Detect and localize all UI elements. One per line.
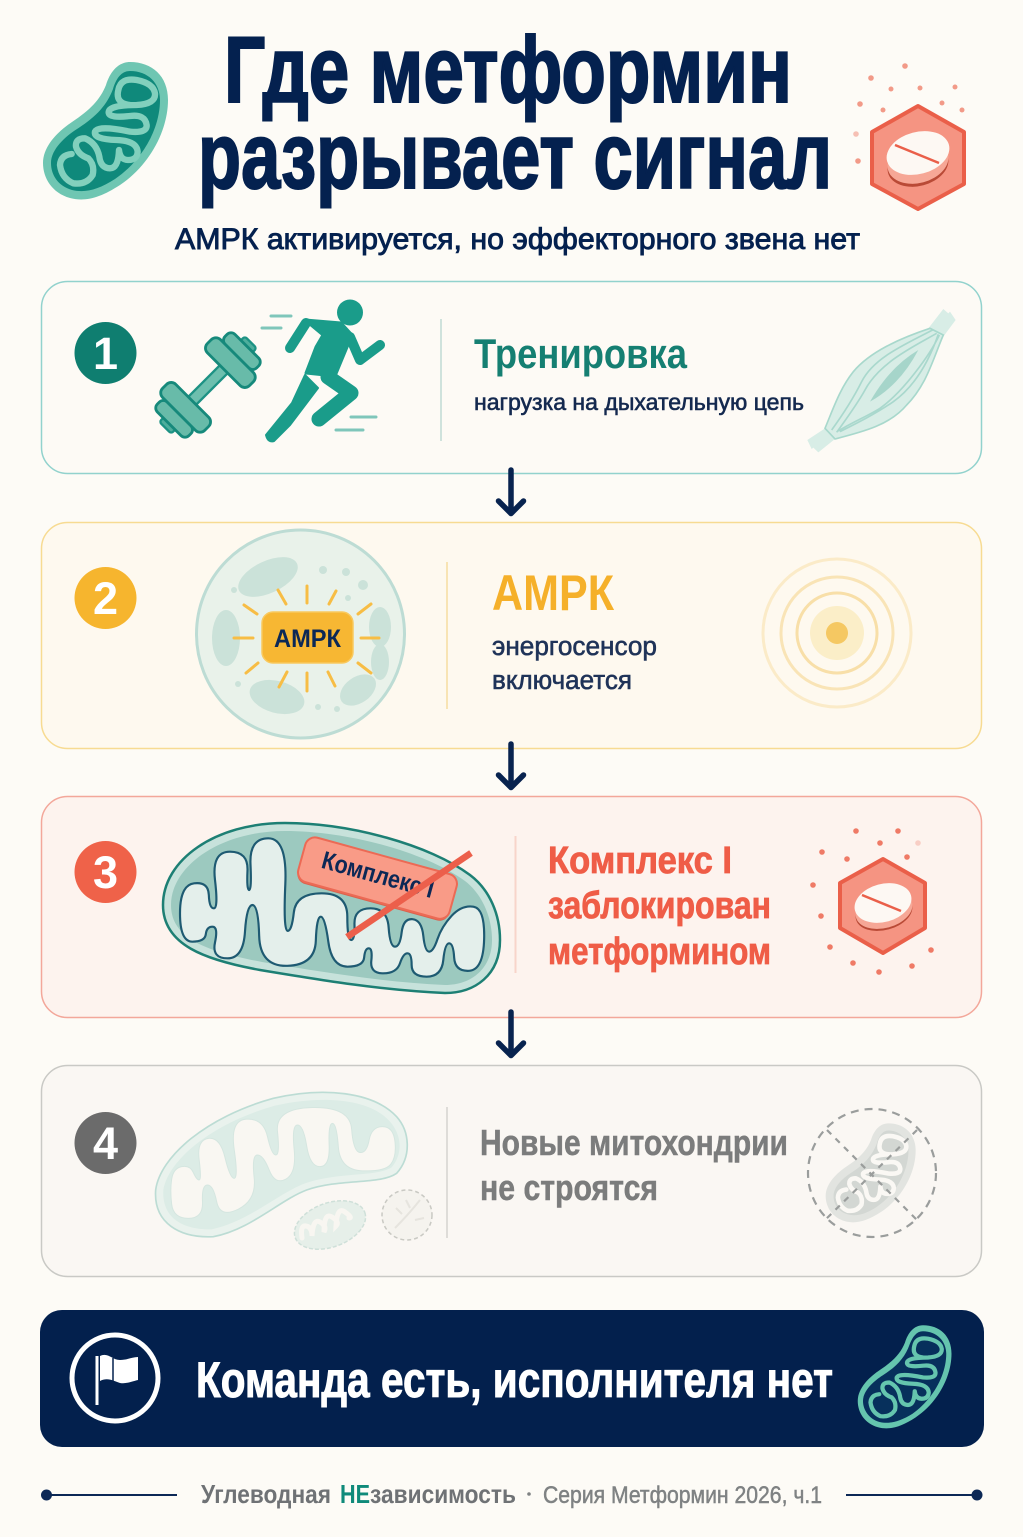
AMPK rays [234, 586, 379, 691]
footer: НЕ [340, 1479, 370, 1509]
banner text: Команда есть, исполнителя нет [196, 1352, 833, 1408]
arrow 1 to 2 [498, 470, 524, 514]
step number 4: 4 [93, 1118, 118, 1169]
step 2 heading: АМРК [492, 565, 614, 621]
arrow 3 to 4 [498, 1012, 524, 1056]
icon: metformin pill top right [853, 63, 964, 209]
panel: step 1 training [42, 282, 982, 474]
AMPK box: АМРК [274, 625, 342, 653]
step 4 heading [480, 1122, 788, 1208]
step 3 heading: Комплекс I [548, 840, 732, 882]
footer: зависимость [370, 1479, 516, 1509]
step 4 heading: Новые митохондрии [480, 1122, 788, 1163]
step 1 heading: Тренировка [474, 330, 688, 377]
AMPK box [262, 612, 353, 663]
step 2 description: включается [492, 665, 632, 695]
illustration: cell with AMPK [196, 530, 404, 738]
step number 1: 1 [93, 328, 118, 379]
title [198, 17, 832, 208]
step number 3: 3 [93, 847, 118, 898]
step number 2 [74, 567, 136, 629]
step number 1 [74, 322, 136, 384]
icon: crossed-out mitochondrion [808, 1109, 936, 1237]
footer: Серия Метформин 2026, ч.1 [543, 1482, 822, 1509]
arrow 2 to 3 [498, 744, 524, 788]
title: Где метформин [224, 17, 792, 122]
icon: flag in circle [72, 1335, 158, 1421]
icon: dumbbell [144, 321, 272, 449]
step 2 description [492, 631, 657, 695]
illustration: faded mitochondria [156, 1092, 432, 1258]
subtitle: АМРК активируется, но эффекторного звена нет [175, 223, 860, 256]
icon: metformin pill [810, 828, 934, 975]
complex I label: Комплекс I [319, 846, 437, 904]
icon: signal rings [763, 559, 911, 707]
banner: conclusion [40, 1310, 984, 1447]
step 3 heading [548, 840, 771, 973]
step number 4 [74, 1112, 136, 1174]
panel: step 4 no new mitochondria [42, 1066, 982, 1276]
step 3 heading: метформином [548, 931, 771, 973]
title: разрывает сигнал [198, 103, 832, 208]
red block slash [347, 853, 471, 937]
icon: runner [262, 300, 380, 441]
panel: step 2 AMPK [42, 522, 982, 748]
icon: mitochondrion top left [43, 62, 168, 199]
step number 2: 2 [93, 573, 118, 624]
complex I label [295, 835, 459, 923]
step 2 description: энергосенсор [492, 631, 657, 661]
step number 3 [74, 841, 136, 903]
step 1 description: нагрузка на дыхательную цепь [474, 389, 804, 415]
step 3 heading: заблокирован [548, 885, 771, 927]
footer [41, 1479, 982, 1509]
footer: Углеводная [201, 1479, 331, 1509]
icon: mitochondrion on banner [858, 1325, 952, 1428]
icon: muscle [807, 309, 956, 452]
illustration: mitochondrion with blocked complex I [163, 823, 500, 993]
step 4 heading: не строятся [480, 1167, 658, 1208]
panel: step 3 complex I [42, 796, 982, 1018]
